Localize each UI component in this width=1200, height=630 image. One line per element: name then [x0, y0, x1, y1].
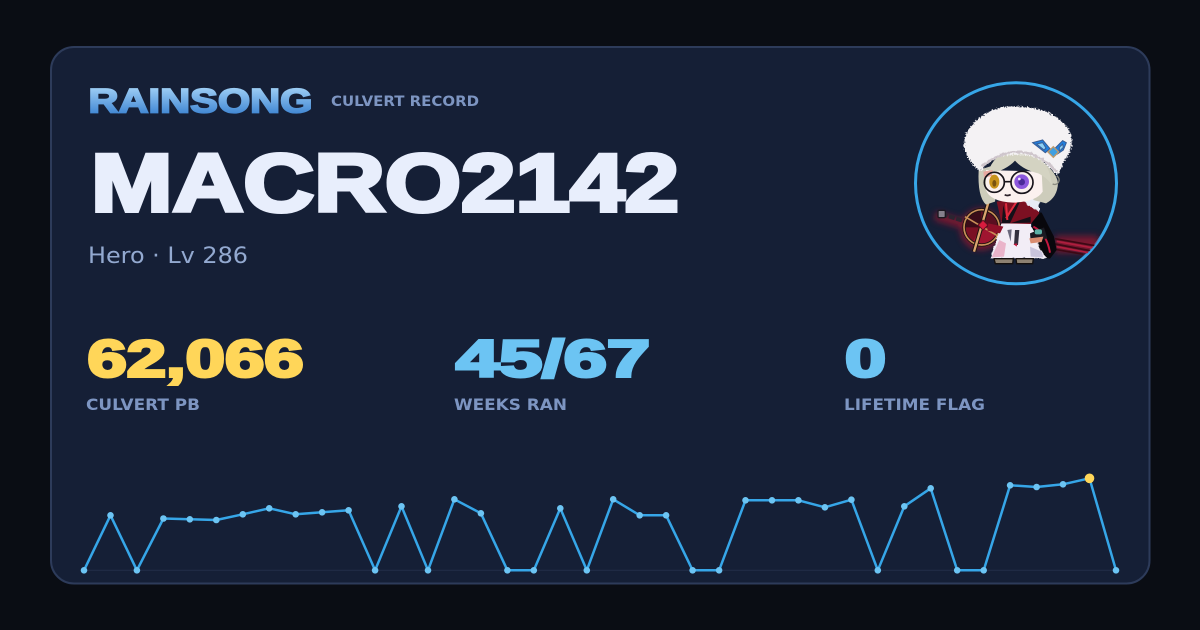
eye: amber	[989, 175, 999, 189]
avatar: character in ring	[916, 83, 1116, 284]
data points	[81, 481, 1119, 574]
subtitle: culvert record: CULVERT RECORD	[331, 94, 479, 110]
hat gem	[1033, 140, 1066, 157]
stat: lifetime flag	[844, 330, 985, 414]
eye: violet	[1014, 174, 1029, 189]
mouth	[1004, 194, 1011, 196]
fur shading	[982, 152, 1057, 172]
bodice and collar	[996, 201, 1040, 224]
glasses	[984, 171, 1033, 193]
panel: record card	[51, 47, 1150, 584]
brand wordmark: RAINSONG	[88, 82, 312, 120]
line chart: weekly culvert scores	[81, 474, 1119, 574]
fringe	[988, 154, 1044, 176]
feet	[994, 259, 1013, 264]
dress	[990, 222, 1047, 258]
weapon glow	[934, 209, 1098, 253]
stat: culvert pb	[86, 330, 304, 414]
face	[986, 170, 1043, 203]
stat label: LIFETIME FLAG	[844, 395, 985, 414]
icon: chibi character sprite	[934, 107, 1098, 264]
spear shaft	[946, 214, 979, 228]
avatar ring	[916, 83, 1116, 284]
stat value: 62,066	[88, 330, 304, 388]
stat value: 0	[845, 330, 886, 388]
cape	[1032, 212, 1057, 259]
right spear	[1055, 239, 1097, 254]
sleeve and cuff	[987, 223, 1003, 233]
personal best marker	[1085, 474, 1094, 483]
stat label: WEEKS RAN	[454, 395, 567, 414]
stat label: CULVERT PB	[86, 395, 200, 414]
title: character name: MACRO2142	[91, 138, 679, 229]
score line	[84, 478, 1116, 570]
fur hat	[964, 107, 1072, 175]
wheel ornament	[973, 228, 997, 244]
stat value: 45/67	[456, 330, 650, 388]
class and level: Hero · Lv 286	[88, 244, 248, 269]
hair	[978, 166, 996, 205]
stat: weeks ran	[454, 330, 650, 414]
hair ribbon	[983, 170, 993, 177]
